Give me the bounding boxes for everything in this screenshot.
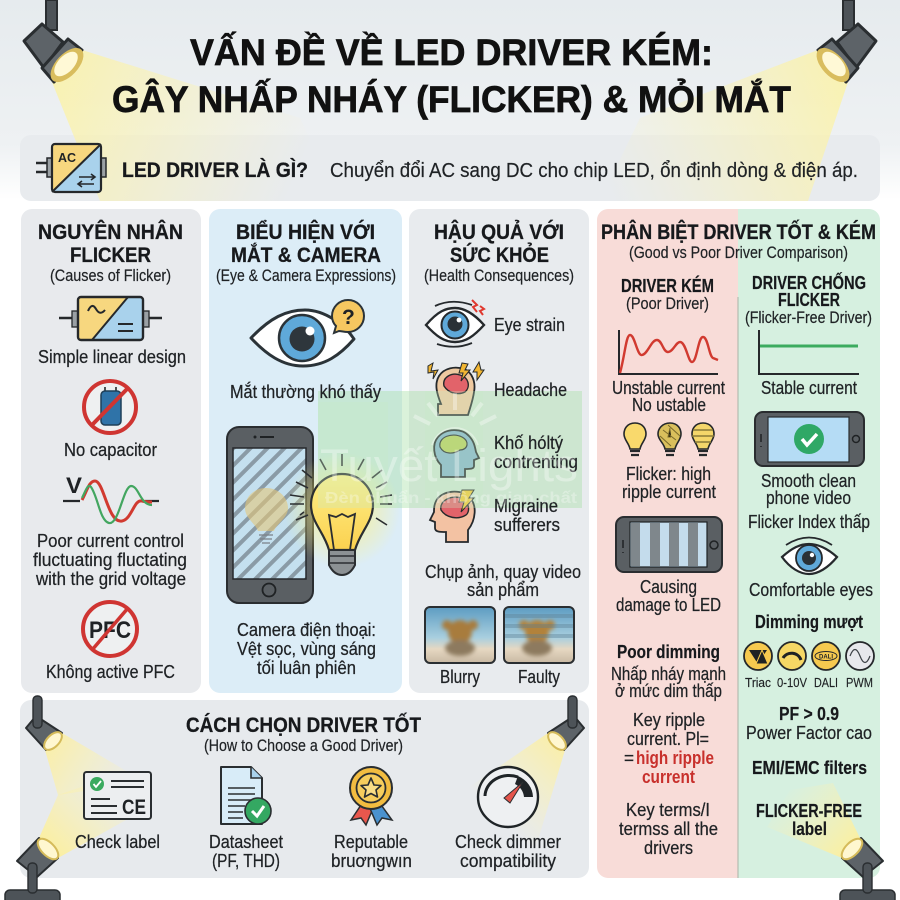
text: key ripple: high ripple (636, 748, 714, 768)
text: unstable current: No ustable (632, 395, 706, 415)
text: blurry: Blurry (440, 667, 480, 687)
text: headache: Headache (494, 380, 567, 400)
heading: eye and camera (216, 220, 396, 285)
text: key terms: Key terms/I (626, 800, 710, 820)
icon: glowing bulb (284, 452, 400, 575)
icon: no PFC (83, 602, 137, 656)
labels: dimming types: Triac (745, 676, 771, 690)
text: power factor: PF > 0.9 (779, 704, 839, 724)
icon: no capacitor (84, 381, 136, 433)
spotlight: bottom right (838, 835, 895, 900)
text: poor current control: fluctuating fluctating (33, 550, 187, 570)
icon: headache (428, 362, 484, 415)
beam: bottom right (767, 783, 860, 858)
watermark: Tuyet Lights: Tuyết Lights (320, 440, 578, 491)
labels: dimming types: DALI (814, 676, 838, 690)
text: phone camera (237, 620, 376, 678)
column: comparison (601, 220, 876, 858)
title: VẤN ĐỀ VỀ LED DRIVER KÉM: (190, 31, 713, 73)
heading: flicker-free driver: (Flicker-Free Driver) (745, 309, 872, 327)
text: migraine: Migraine (494, 496, 558, 516)
icons: dimming types: DALI (819, 654, 833, 660)
labels: dimming types: 0-10V (777, 676, 808, 690)
heading: causes: FLICKER (70, 244, 151, 267)
text: smooth video: Smooth clean (761, 471, 856, 491)
heading: eye and camera: BIỂU HIỆN VỚI (236, 220, 375, 244)
text: stable current: Stable current (761, 378, 857, 398)
text: concentration: contrenting (494, 452, 578, 472)
image: faulty photo (504, 607, 574, 663)
icons: flickering bulbs (624, 423, 714, 455)
text: phone camera: tối luân phiên (257, 658, 356, 678)
text: flicker-free label: FLICKER-FREE (756, 801, 862, 821)
icon: eye strain (426, 300, 484, 347)
icon: no PFC: PFC (89, 617, 131, 644)
column: eye and camera (216, 220, 400, 678)
icon: check label: CE (122, 796, 146, 819)
icon: migraine head (430, 490, 475, 542)
text: key ripple: Key ripple (633, 710, 705, 730)
heading: flicker-free driver (745, 272, 872, 327)
labels: dimming types (745, 676, 873, 690)
panel: causes of flicker background (21, 209, 201, 693)
text: key terms (619, 800, 718, 858)
heading: comparison (601, 220, 876, 262)
icon: linear driver (59, 297, 162, 340)
icon: AC DC driver (36, 144, 106, 192)
heading: eye and camera: MẮT & CAMERA (231, 243, 381, 267)
panel: comparison background (597, 209, 880, 878)
labels: dimming types: PWM (846, 676, 873, 690)
spotlight: panel top left (26, 696, 65, 753)
text: poor dimming: Nhấp nháy mạnh (611, 664, 726, 684)
image: blurry photo (425, 607, 495, 663)
heading: causes (38, 220, 183, 285)
text: key terms: termss all the (619, 819, 718, 839)
text: key ripple (624, 710, 714, 787)
panel: eye and camera background (209, 209, 402, 693)
heading: health: SỨC KHỎE (450, 243, 549, 267)
photo frames (425, 607, 574, 663)
title (112, 31, 791, 120)
icon: AC DC driver: AC (58, 151, 76, 165)
heading: comparison: (Good vs Poor Driver Comparison) (629, 244, 848, 262)
panel: how to choose background (20, 700, 589, 878)
text: photo and video: Chụp ảnh, quay video (425, 562, 581, 582)
heading: causes: NGUYÊN NHÂN (38, 220, 183, 244)
heading: poor driver (621, 275, 714, 313)
icon: landscape phone good (755, 412, 864, 466)
spotlight: top left (24, 0, 340, 201)
icon: eye with question (251, 300, 364, 366)
text: definition: Chuyển đổi AC sang DC cho chip LED, ổn định dòng & điện áp. (330, 159, 858, 182)
chart: voltage wave: V (66, 473, 82, 498)
heading: how to choose: (How to Choose a Good Driver) (204, 737, 403, 755)
icon: phone with stripes (227, 427, 313, 603)
text: migraine: sufferers (494, 515, 560, 535)
heading: poor driver: DRIVER KÉM (621, 275, 714, 296)
chart: stable current (759, 330, 859, 374)
heading: smooth dimming: Dimming mượt (755, 612, 863, 632)
text: poor current control: Poor current control (37, 531, 184, 551)
text: phone camera: Camera điện thoại: (237, 620, 376, 640)
heading: causes: (Causes of Flicker) (50, 267, 171, 285)
icon: blue head (434, 430, 479, 477)
icons: dimming types (744, 642, 874, 670)
icon: check label (84, 772, 151, 819)
text: flicker index: Flicker Index thấp (748, 512, 870, 532)
text: comfortable eyes: Comfortable eyes (749, 580, 873, 600)
icon: medal (350, 767, 392, 825)
text: causing damage (616, 577, 721, 615)
text: migraine (494, 496, 560, 535)
heading: how to choose (186, 713, 421, 755)
text: simple linear design: Simple linear design (38, 347, 186, 367)
spotlight: bottom left (5, 835, 62, 900)
column: causes of flicker (33, 220, 187, 682)
text: check dimmer: compatibility (460, 851, 556, 871)
icon: eye with question: ? (342, 306, 355, 329)
text: reputable: Reputable (334, 832, 408, 852)
column: how to choose (5, 696, 895, 900)
heading: eye and camera: (Eye & Camera Expressions) (216, 267, 396, 285)
text: poor dimming (611, 642, 726, 701)
watermark background (318, 391, 582, 508)
spotlight: panel top right (545, 696, 584, 753)
icon: comfortable eye (782, 538, 837, 574)
heading: flicker-free driver: FLICKER (778, 290, 840, 310)
text: power factor (746, 704, 872, 743)
text: unstable current: Unstable current (612, 378, 725, 398)
text: key ripple: current (642, 767, 695, 787)
watermark: Tuyet Lights: Đèn chuẩn - không gian chất (325, 489, 578, 507)
text: hard to see: Mắt thường khó thấy (230, 381, 381, 402)
text: reputable (331, 832, 412, 871)
page background (0, 0, 900, 200)
text: no active PFC: Không active PFC (46, 662, 175, 682)
text: causing damage: damage to LED (616, 595, 721, 615)
heading: poor driver: (Poor Driver) (626, 295, 709, 313)
heading: health (424, 220, 574, 285)
heading: health: (Health Consequences) (424, 267, 574, 285)
text: flicker ripple: ripple current (622, 482, 716, 502)
watermark: Tuyet Lights (318, 391, 578, 508)
text: reputable: bruơngwın (331, 851, 412, 871)
icon: datasheet (221, 767, 271, 824)
column: health consequences (424, 220, 581, 687)
text: concentration (494, 433, 578, 472)
text: key ripple: current. Pl= (627, 729, 709, 749)
text: check dimmer (455, 832, 561, 871)
chart: unstable current (619, 330, 718, 374)
text: faulty: Faulty (518, 667, 560, 687)
text: smooth video (761, 471, 856, 508)
text: check dimmer: Check dimmer (455, 832, 561, 852)
text: photo and video (425, 562, 581, 600)
spotlight: top right (600, 0, 876, 201)
panel: what is LED driver background (20, 135, 880, 201)
text: flicker-free label (756, 801, 862, 839)
text: power factor: Power Factor cao (746, 723, 872, 743)
text: smooth video: phone video (766, 488, 851, 508)
text: datasheet: (PF, THD) (212, 851, 280, 871)
text: key ripple: = (624, 748, 634, 768)
text: key terms: drivers (644, 838, 693, 858)
text: causing damage: Causing (640, 577, 697, 597)
text: unstable current (612, 378, 725, 415)
heading: health: HẬU QUẢ VỚI (434, 220, 564, 244)
panel: health consequences background (409, 209, 589, 693)
text: flicker-free label: label (792, 819, 827, 839)
text: check label: Check label (75, 832, 160, 852)
heading: what is LED driver: LED DRIVER LÀ GÌ? (122, 159, 308, 182)
text: poor current control (33, 531, 187, 589)
icon: dimmer gauge (478, 767, 538, 827)
text: eye strain: Eye strain (494, 315, 565, 335)
text: poor dimming: ở mức dim thấp (615, 681, 722, 701)
heading: flicker-free driver: DRIVER CHỐNG (752, 272, 866, 293)
text: flicker ripple (622, 464, 716, 502)
chart: voltage wave (63, 473, 159, 523)
text: no capacitor: No capacitor (64, 440, 157, 460)
text: poor dimming: Poor dimming (617, 642, 720, 662)
text: datasheet (209, 832, 283, 871)
icon: phone with bands (616, 517, 722, 572)
heading: how to choose: CÁCH CHỌN DRIVER TỐT (186, 713, 421, 737)
text: datasheet: Datasheet (209, 832, 283, 852)
text: photo and video: sản phẩm (467, 580, 539, 600)
text: concentration: Khố hóltý (494, 433, 563, 453)
text: poor current control: with the grid voltage (35, 569, 186, 589)
text: EMI filters: EMI/EMC filters (752, 758, 867, 778)
text: phone camera: Vệt sọc, vùng sáng (237, 639, 376, 659)
title: GÂY NHẤP NHÁY (FLICKER) & MỎI MẮT (112, 78, 791, 120)
text: flicker ripple: Flicker: high (626, 464, 711, 484)
beams: panel lamps (39, 733, 565, 858)
